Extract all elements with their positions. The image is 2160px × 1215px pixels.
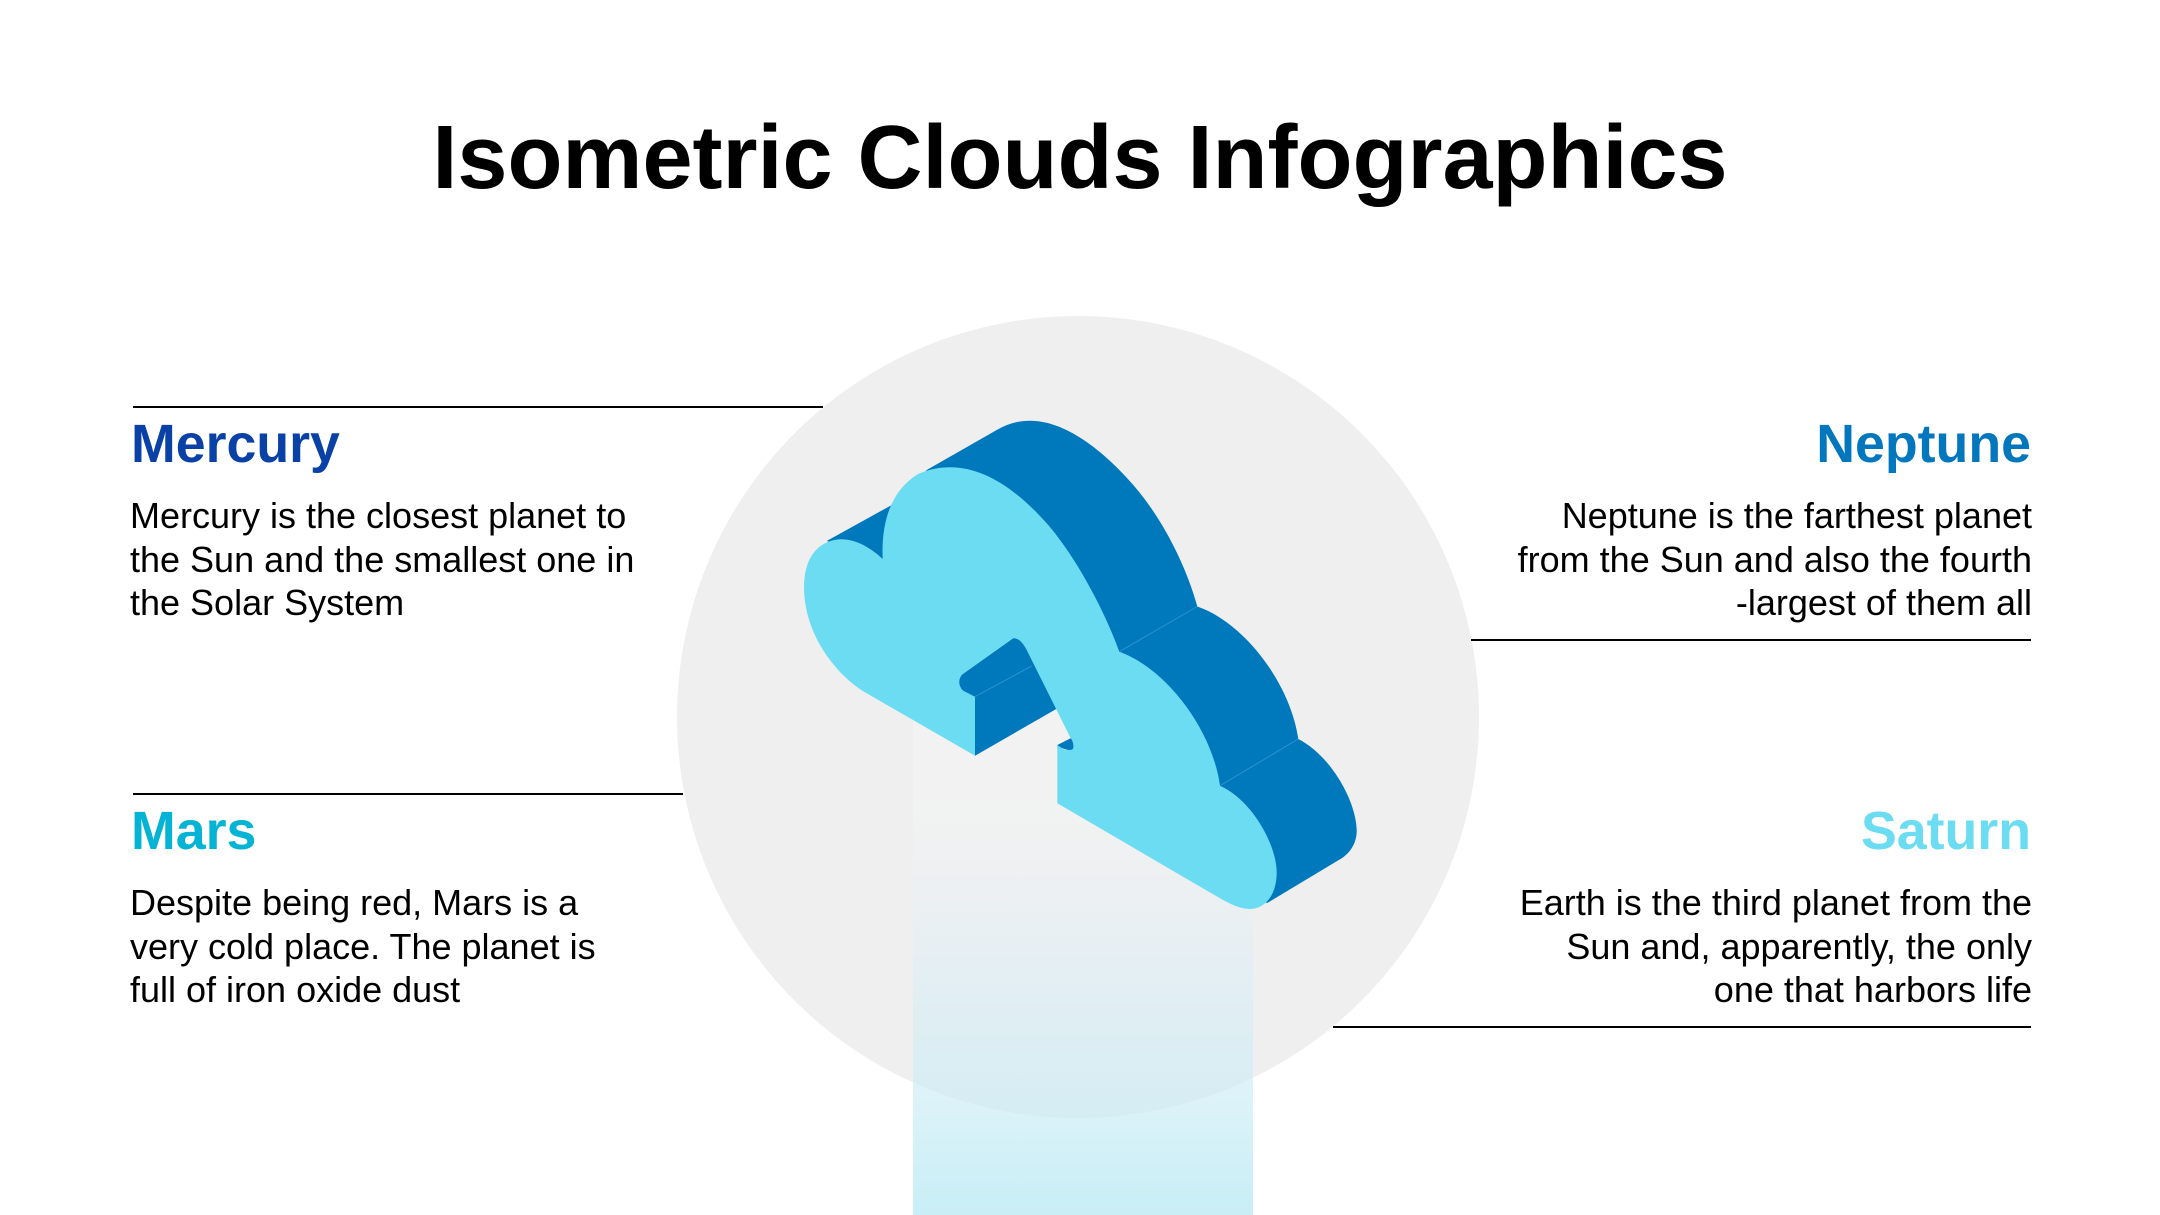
panel: Mercury — [130, 406, 823, 623]
Mercury text: the Solar System — [130, 582, 404, 623]
Neptune text: Neptune is the farthest planet — [1562, 495, 2032, 536]
Saturn text — [1520, 882, 2032, 1010]
cloud inner notch extrusion — [945, 630, 1058, 756]
Neptune text: from the Sun and also the fourth — [1518, 538, 2032, 580]
panel: Neptune — [1471, 414, 2032, 641]
Mercury text — [130, 495, 634, 623]
title: Isometric Clouds Infographics — [432, 108, 1728, 208]
Neptune rule — [1471, 639, 2031, 641]
cloud facet seams — [975, 606, 1298, 786]
Neptune heading: Neptune — [1816, 414, 2031, 474]
Saturn rule — [1333, 1026, 2031, 1028]
cloud back extrusion — [827, 421, 1357, 903]
Saturn text: one that harbors life — [1714, 969, 2032, 1010]
Mercury text: Mercury is the closest planet to — [130, 495, 626, 536]
Saturn text: Earth is the third planet from the — [1520, 882, 2032, 923]
background circle — [677, 316, 1479, 1118]
Mars rule — [133, 793, 683, 795]
cloud small notch — [1057, 738, 1073, 750]
Mercury rule — [133, 406, 823, 408]
Saturn text: Sun and, apparently, the only — [1566, 926, 2032, 966]
Mars text: very cold place. The planet is — [130, 926, 596, 966]
panel: Saturn — [1333, 801, 2032, 1028]
Mars heading: Mars — [131, 801, 256, 861]
gradient light beam under the cloud — [913, 700, 1253, 1215]
cloud front face — [804, 467, 1277, 909]
Neptune text — [1518, 495, 2032, 623]
panel: Mars — [130, 793, 683, 1010]
Mars text: full of iron oxide dust — [130, 969, 460, 1010]
Mercury heading: Mercury — [131, 414, 340, 474]
Mercury text: the Sun and the smallest one in — [130, 538, 634, 580]
Mars text — [130, 882, 596, 1010]
Saturn heading: Saturn — [1861, 801, 2031, 861]
Neptune text: -largest of them all — [1736, 582, 2032, 623]
Mars text: Despite being red, Mars is a — [130, 882, 578, 923]
